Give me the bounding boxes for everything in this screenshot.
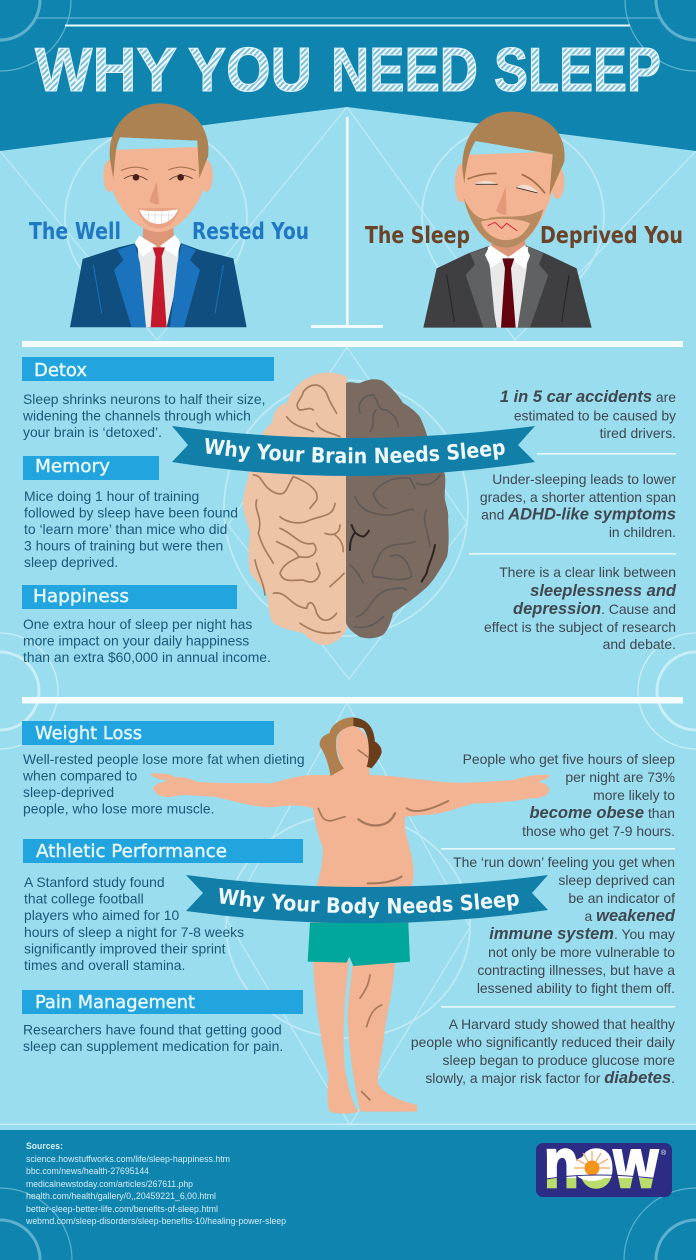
panel: detox: Sleep shrinks neurons to half their size, [23,391,265,407]
panel: memory [23,456,238,570]
label: the sleep deprived you: The Sleep [365,223,470,249]
sources: bbc.com/news/health-27695144 [26,1166,149,1176]
divider: brain section [22,341,683,347]
text: car accidents: 1 in 5 car accidents are [500,388,676,406]
sources: webmd.com/sleep-disorders/sleep-benefits-10/healing-power-sleep [25,1216,286,1226]
sources: science.howstuffworks.com/life/sleep-happiness.htm [26,1154,230,1164]
text: attention span [480,471,676,540]
text: diabetes: people who significantly reduced their daily [411,1034,675,1050]
panel: pain management: Pain Management [35,992,195,1013]
footer band [0,1130,696,1260]
text: immune system: contracting illnesses, but have a [477,962,675,978]
illustration: body [150,717,550,1114]
text: depression: effect is the subject of research [484,619,676,635]
panel: detox: Detox [34,360,87,381]
text: obesity: become obese than [529,804,675,822]
panel: athletic performance: that college football [24,890,144,906]
panel: happiness [22,585,271,665]
sources [25,1141,286,1226]
text: diabetes: sleep began to produce glucose more [443,1052,675,1068]
sources: Sources: [26,1141,63,1151]
text: attention span: in children. [609,524,676,540]
logo: NOW: ® [661,1149,667,1157]
label: the well rested you [29,219,309,245]
panel: happiness: more impact on your daily happiness [23,632,249,648]
panel: detox [22,357,274,440]
header band [0,0,696,151]
banner: why your body needs sleep [186,875,548,924]
footer decoration [0,1188,696,1260]
panel: pain management: Researchers have found that getting good [23,1022,282,1038]
panel: athletic performance: times and overall stamina. [24,957,185,973]
text: attention span: Under-sleeping leads to lower [492,471,676,487]
geometric backdrop: body [226,703,470,1125]
text: obesity: People who get five hours of sleep [463,751,675,767]
corner arcs: mid section [0,633,696,749]
panel: athletic performance: Athletic Performance [36,841,227,862]
title [35,36,661,105]
panel: athletic performance: players who aimed for 10 [24,907,179,923]
panel: weight loss [22,721,305,816]
text: diabetes: slowly, a major risk factor for diabetes. [425,1069,675,1087]
sources: better-sleep-better-life.com/benefits-of-sleep.html [26,1204,218,1214]
panel: detox: widening the channels through which [22,408,251,424]
panel: memory: Memory [35,456,110,477]
divider: portraits stand [311,117,383,328]
panel: weight loss: Weight Loss [35,723,142,744]
panel: memory: sleep deprived. [24,554,118,570]
title: NEED [331,36,478,105]
text: immune system [453,854,676,996]
text: obesity: those who get 7-9 hours. [522,823,675,839]
title: YOU [188,36,312,105]
sources: medicalnewstoday.com/articles/267611.php [26,1179,193,1189]
text: immune system: lessened ability to fight them off. [477,980,675,996]
text: obesity [463,751,675,839]
text: immune system: be an indicator of [568,890,675,906]
panel: athletic performance: significantly improved their sprint [24,940,226,956]
illustration: brain [243,372,449,645]
illustration: sleep deprived man [423,112,592,328]
text: immune system: immune system. You may [489,925,675,943]
text: attention span: grades, a shorter attention span [480,489,676,505]
geometric backdrop: brain [224,347,468,679]
text: obesity: more likely to [593,787,675,803]
label: the sleep deprived you [365,223,683,249]
panel: memory: 3 hours of training but were then [24,538,223,554]
text: immune system: sleep deprived can [558,872,675,888]
text: immune system: The ‘run down’ feeling you get when [453,854,675,870]
text: depression: sleeplessness and [530,582,677,600]
sources: health.com/health/gallery/0,,20459221_6,00.html [26,1191,216,1201]
text: depression: depression. Cause and [513,600,676,618]
panel: memory: Mice doing 1 hour of training [24,488,199,504]
panel: happiness: Happiness [33,586,129,607]
label: the well rested you: The Well [29,219,121,245]
divider: body section [22,697,683,704]
panel: pain management: sleep can supplement medication for pain. [23,1038,283,1054]
label: the well rested you: Rested You [192,219,309,245]
text: depression: There is a clear link between [499,564,676,580]
panel: weight loss: sleep-deprived [23,784,114,800]
panel: athletic performance [23,839,303,973]
text: depression [484,564,677,652]
panel: memory: followed by sleep have been found [24,504,238,520]
panel: detox: your brain is ‘detoxed’. [23,424,162,440]
banner: why your body needs sleep: Why Your Body Needs Sleep [219,888,519,918]
panel: weight loss: Well-rested people lose more fat when dieting [23,751,305,767]
panel: weight loss: people, who lose more muscle. [23,800,214,816]
illustration: well rested man [70,103,247,327]
logo: NOW: now [544,1124,658,1202]
panel: weight loss: when compared to [22,768,138,784]
text: immune system: a weakened [585,907,676,925]
text: immune system: not only be more vulnerable to [488,944,675,960]
panel: happiness: than an extra $60,000 in annual income. [23,649,271,665]
header decoration [0,0,696,71]
panel: happiness: One extra hour of sleep per night has [23,616,252,632]
text: attention span: and ADHD-like symptoms [481,506,676,524]
text: depression: and debate. [603,636,676,652]
text: car accidents: tired drivers. [600,425,676,441]
geometric backdrop: portraits [0,107,696,340]
title: WHY [35,36,177,105]
text: obesity: per night are 73% [565,769,675,785]
panel: athletic performance: hours of sleep a night for 7-8 weeks [24,924,244,940]
panel: memory: to ‘learn more’ than mice who did [24,521,227,537]
panel: pain management [22,990,303,1054]
banner: why your brain needs sleep: Why Your Brain Needs Sleep [205,438,505,464]
text: diabetes: A Harvard study showed that healthy [449,1016,675,1032]
text: car accidents: estimated to be caused by [514,408,676,424]
text: diabetes [411,1016,675,1087]
banner: why your brain needs sleep [172,426,535,476]
title: SLEEP [494,36,661,105]
panel: athletic performance: A Stanford study found [24,874,165,890]
text: car accidents [500,388,676,441]
